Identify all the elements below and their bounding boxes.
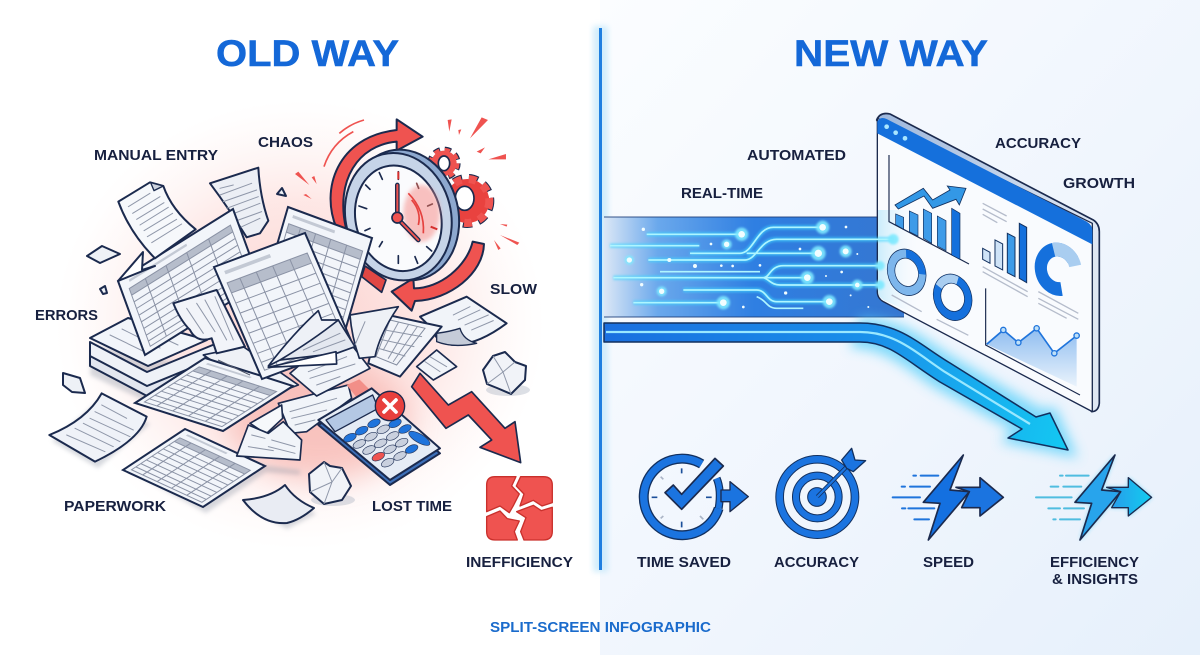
dashboard window — [877, 113, 1099, 412]
paper: fold upper wing — [268, 311, 338, 366]
paper: loose blank sheet — [243, 485, 314, 523]
paper: flying page — [118, 182, 196, 258]
paper: wide text sheet — [278, 385, 352, 433]
red downward arrow — [412, 373, 521, 463]
icon: bottom circular arrow — [392, 242, 484, 311]
paper: front spreadsheet — [214, 233, 353, 379]
label: time saved: TIME SAVED — [637, 554, 731, 571]
label: slow: SLOW — [490, 281, 538, 298]
icon: accuracy target — [780, 448, 866, 535]
paper: left spreadsheet — [118, 209, 260, 355]
paper: upper page behind pile — [210, 168, 268, 237]
title: old way: OLD WAY — [216, 33, 399, 74]
paper: lower text sheet — [237, 422, 302, 460]
label: real-time: REAL-TIME — [681, 185, 763, 202]
paper: line across upper pile sheet — [218, 360, 250, 375]
red glow behind paper pile — [55, 100, 545, 550]
label: efficiency and insights — [1050, 554, 1139, 588]
paper: folded pages in centre — [268, 307, 398, 367]
paper: small grid sheet right — [368, 313, 442, 377]
label: manual entry: MANUAL ENTRY — [94, 147, 218, 164]
paper: soft shadows under loose sheets — [52, 345, 316, 529]
glowing data lines — [610, 221, 899, 309]
data stream band — [604, 217, 904, 317]
label: efficiency and insights: EFFICIENCY — [1050, 554, 1139, 571]
paper: middle spreadsheet — [135, 358, 293, 431]
panel: new way illustration — [604, 113, 1099, 458]
icon: speed bolt — [893, 455, 1003, 540]
label: automated: AUTOMATED — [747, 147, 846, 164]
paper: sheet behind middle spreadsheet — [203, 347, 298, 397]
icon: gears — [431, 151, 489, 223]
label: growth: GROWTH — [1063, 175, 1135, 192]
chart: outlined bars — [983, 223, 1027, 283]
paper: stacked sheets — [90, 318, 220, 396]
label: accuracy top: ACCURACY — [995, 135, 1081, 152]
chart: large donut — [1032, 241, 1084, 298]
chart: growth bars with trend arrow — [889, 155, 969, 264]
central divider — [593, 26, 608, 572]
icon: top circular arrow — [331, 119, 423, 228]
paper: curled sheet at centre left — [173, 290, 245, 353]
paper: rear spreadsheet — [261, 207, 372, 331]
chart: donut two — [924, 265, 981, 329]
icon: broken square — [487, 477, 552, 540]
clock with arrows and gears — [295, 117, 519, 311]
label: errors: ERRORS — [35, 307, 98, 324]
paper: fold back wing — [280, 320, 355, 360]
icon: crumpled ball upper — [483, 352, 530, 396]
label: paperwork: PAPERWORK — [64, 498, 166, 515]
paper: right text sheet — [417, 297, 507, 380]
label: chaos: CHAOS — [258, 134, 313, 151]
paper: fold lower wing — [268, 352, 337, 367]
paper: small white sheet — [250, 405, 283, 434]
blue glowing flow arrow — [604, 318, 1078, 458]
icon: motion sparks — [295, 117, 519, 250]
icon: crumpled ball lower — [309, 462, 355, 506]
label: inefficiency: INEFFICIENCY — [466, 554, 573, 571]
paper: curled sheet beside fold — [350, 307, 398, 358]
dashboard header bar — [877, 118, 1092, 244]
paper: curled text page lower left — [49, 393, 147, 462]
panel: old way illustration — [49, 117, 552, 540]
paper: red wedge gap — [347, 379, 370, 397]
paper: sheets around the lower centre — [203, 347, 370, 460]
paper: lower spreadsheet — [123, 429, 265, 507]
icon: clock — [332, 138, 473, 292]
footer caption: SPLIT-SCREEN INFOGRAPHIC — [490, 620, 712, 636]
paper: text sheet under front spreadsheet — [290, 330, 370, 396]
label: lost time: LOST TIME — [372, 498, 452, 515]
icon: time saved — [644, 458, 748, 535]
icon: calculator — [318, 388, 440, 485]
icon: lower left arrow tail — [362, 266, 386, 292]
chart: line chart — [986, 288, 1080, 395]
text lines upper middle — [892, 203, 1078, 335]
icon: error badge — [375, 391, 405, 421]
icon: efficiency bolt — [1036, 455, 1152, 540]
paper: corner curl on left spreadsheet — [118, 252, 155, 281]
title: new way: NEW WAY — [794, 33, 988, 74]
scraps — [63, 188, 286, 393]
dashboard glow at left edge — [878, 210, 920, 317]
label: speed: SPEED — [923, 554, 974, 571]
label: efficiency and insights: & INSIGHTS — [1052, 571, 1138, 588]
chart: donut one — [881, 243, 933, 301]
label: accuracy: ACCURACY — [774, 554, 859, 571]
